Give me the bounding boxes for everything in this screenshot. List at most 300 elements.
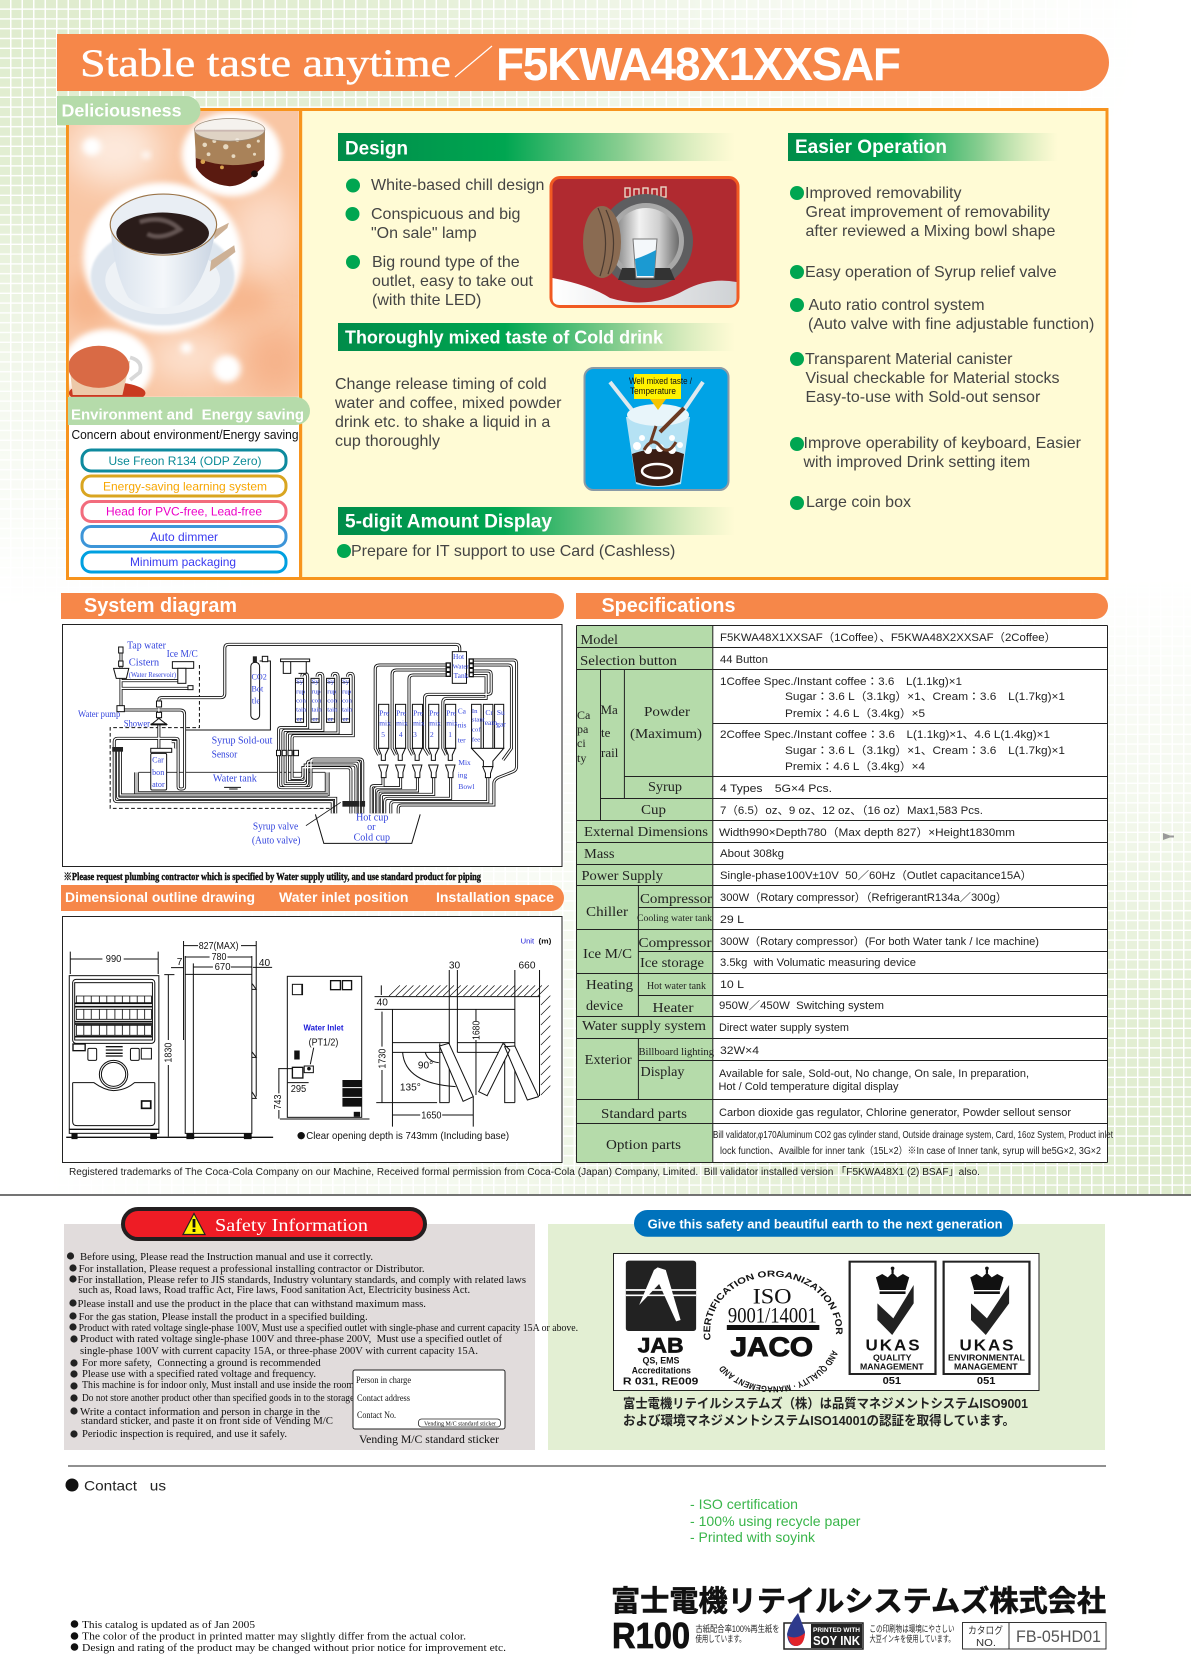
UKAS environmental mark (944, 1262, 1029, 1387)
safety text: For installation, Please request a professional installing contractor or Distributor. (79, 1263, 425, 1275)
section: Easier Operation: Easy-to-use with Sold-out sensor (806, 389, 1041, 406)
dimension labels: 660 (519, 961, 536, 972)
diagram labels: Bowl (458, 782, 474, 791)
table values: 1Coffee Spec./Instant coffee：3.6 L(1.1kg)×1 (720, 676, 962, 688)
diagram labels: tain (312, 707, 322, 714)
soy ink mark: 大豆インキを使用しています。 (870, 1633, 954, 1644)
safety text: Please use with a specified rated voltage and frequency. (82, 1368, 316, 1380)
section: 5-digit display: 5-digit Amount Display (345, 512, 552, 532)
dimension labels: 1650 (421, 1110, 442, 1121)
safety text: Please install and use the product in the place that can withstand maximum mass. (78, 1298, 426, 1310)
image: mixed cup: Well mixed taste / (629, 376, 692, 386)
diagram labels: Cold cup (354, 833, 390, 844)
diagram labels: con (342, 697, 352, 704)
table row labels: Ca (577, 708, 591, 722)
back view (278, 976, 369, 1119)
UKAS quality mark: UKAS (866, 1337, 920, 1354)
dimension labels: 990 (106, 954, 122, 965)
section: Easier Operation: Easier Operation (795, 137, 947, 158)
dimension labels: 780 (212, 952, 227, 963)
section: Design: outlet, easy to take out (372, 273, 534, 290)
diagram labels: Ice M/C (167, 649, 198, 660)
UKAS quality mark: QUALITY (873, 1353, 911, 1363)
JAB logo: QS, EMS (642, 1356, 680, 1366)
table row labels: device (586, 999, 623, 1014)
diagram labels: Tap water (127, 640, 167, 651)
heading: drawings: Installation space (436, 889, 554, 905)
table values: 7（6.5）oz、9 oz、12 oz、（16 oz）Max1,583 Pcs. (720, 804, 983, 817)
diagram labels: Sy (296, 678, 304, 685)
dimension labels: 1730 (377, 1048, 388, 1069)
UKAS quality mark: 051 (883, 1375, 901, 1387)
ISO JACO seal: CERTIFICATION ORGANIZATION FOR ENVIRONMENT (703, 1270, 843, 1340)
dimension labels: Unit (521, 937, 534, 946)
diagram labels: In (472, 708, 478, 715)
diagram labels: er (328, 716, 334, 723)
cistern and ice machine (114, 647, 194, 724)
section: 5-digit display: Prepare for IT support to use Card (Cashless) (351, 543, 675, 560)
table row labels: Mass (584, 847, 614, 862)
diagram labels: Water pump (78, 710, 121, 720)
dimension labels: (PT1/2) (309, 1037, 338, 1048)
heading: drawings: Dimensional outline drawing (65, 889, 255, 905)
mixing bowls (379, 748, 455, 778)
ISO JACO seal (703, 1270, 843, 1392)
diagram labels: ing (458, 771, 468, 780)
dimension labels: 295 (291, 1084, 307, 1095)
text: certification statement: 富士電機リテイルシステムズ（株）は品質マネジメントシステムISO9001 (623, 1396, 1028, 1411)
diagram labels: Sy (327, 678, 335, 685)
section: Easier Operation: (Auto valve with fine adjustable function) (808, 316, 1094, 333)
diagram labels: mix (379, 719, 391, 728)
heading: System diagram: System diagram (84, 595, 237, 617)
UKAS environmental mark: 051 (977, 1375, 996, 1387)
eco item 1 (82, 450, 286, 471)
UKAS environmental mark: MANAGEMENT (954, 1362, 1018, 1371)
table row labels: External Dimensions (584, 825, 708, 840)
table row labels: ci (577, 736, 586, 750)
saucer (90, 241, 235, 326)
section: Easier Operation: Visual checkable for Material stocks (806, 370, 1060, 387)
R100 mark: R100 (612, 1615, 690, 1656)
diagram labels: Syrup valve (253, 822, 299, 833)
diagram labels: Pre (446, 709, 457, 718)
dimension labels: 40 (377, 998, 388, 1009)
title banner (57, 34, 1109, 91)
side marker arrow (1163, 833, 1174, 840)
diagram labels: Water tank (213, 774, 258, 785)
diagram labels: or (367, 822, 376, 833)
heading: Specifications (576, 593, 1108, 619)
catalog number box (962, 1622, 1106, 1649)
safety text: Write a contact information and person in charge in the (80, 1406, 320, 1418)
table values: Hot / Cold temperature digital display (718, 1081, 899, 1093)
diagram labels: rup (327, 688, 337, 695)
text: catalog notes: Design and rating of the product may be changed without prior notice for improvement etc. (82, 1642, 506, 1654)
cup outline (315, 814, 420, 843)
table row labels: Exterior (585, 1053, 632, 1068)
section: Design: White-based chill design (371, 177, 544, 194)
table row labels: Cup (641, 803, 666, 818)
catalog number box: FB-05HD01 (1016, 1627, 1101, 1646)
cup body (110, 194, 235, 308)
diagram labels: Mix (458, 758, 471, 767)
diagram labels: nis (458, 721, 467, 730)
section: Easier Operation: with improved Drink setting item (802, 454, 1030, 471)
diagram labels: Hot (453, 652, 464, 661)
diagram labels: (Auto valve) (252, 836, 301, 847)
section: Design (338, 133, 735, 309)
diagram labels: Pre (413, 709, 424, 718)
panel: safety information (64, 1209, 578, 1450)
table: specifications (576, 626, 1113, 1162)
table values: Premix：4.6 L（3.4kg）×4 (785, 760, 925, 773)
soy ink mark (784, 1613, 954, 1649)
table values: Available for sale, Sold-out, No change, On sale, In preparation, (719, 1068, 1029, 1080)
company name: 富士電機リテイルシステムズ株式会社 (611, 1584, 1106, 1618)
eco item 2 (82, 476, 286, 496)
CO2 bottle (251, 656, 268, 719)
UKAS quality mark (850, 1262, 935, 1387)
diagram labels: ator (152, 780, 165, 789)
table row labels: Water supply system (582, 1019, 706, 1034)
section: Thoroughly mixed: Change release timing of cold (335, 376, 547, 393)
safety text: single-phase 100V with current capacity 15A, or three-phase 200V with current capacity 15A. (80, 1345, 478, 1357)
table values: 300W（Rotary compressor）(For both Water tank / Ice machine) (720, 935, 1039, 948)
table values: 10 L (720, 979, 744, 991)
standard sticker: Contact address (357, 1393, 410, 1403)
table values: F5KWA48X1XXSAF（1Coffee）、F5KWA48X2XXSAF（2Coffee） (720, 631, 1056, 644)
diagram labels: er (312, 716, 318, 723)
section: Easier Operation: Auto ratio control system (808, 297, 985, 314)
chart: system diagram (62, 624, 562, 866)
next generation pill: Give this safety and beautiful earth to the next generation (648, 1216, 1003, 1232)
standard sticker: Person in charge (356, 1375, 411, 1385)
label: Environment and Energy saving (68, 397, 310, 425)
installation space (375, 970, 550, 1127)
table row labels: Ice storage (640, 956, 704, 971)
ISO JACO seal: JACO (731, 1332, 813, 1362)
eco item 3: Head for PVC-free, Lead-free (106, 504, 262, 518)
text: eco claims: - 100% using recycle paper (690, 1513, 861, 1529)
table values: 32W×4 (720, 1045, 759, 1057)
section: Easier Operation: Improved removability (805, 185, 962, 202)
diagram labels: tle (252, 697, 260, 706)
ISO JACO seal: AND QUALITY · MANAGEMENT AND (720, 1350, 838, 1392)
heading: drawings: Water inlet position (279, 889, 408, 905)
eco item 4 (82, 526, 286, 546)
diagram labels: Sy (312, 678, 319, 685)
diagram labels: Tank (454, 671, 469, 680)
table values: 2Coffee Spec./Instant coffee：3.6 L(1.1kg)×1、4.6 L(1.4kg)×1 (720, 729, 1050, 741)
table values: 44 Button (720, 654, 768, 666)
soy ink mark: PRINTED WITH (813, 1627, 860, 1634)
table row labels: Ice M/C (583, 947, 632, 962)
diagram labels: Hot cup (356, 813, 388, 824)
safety text: Do not store another product other than specified goods in to the storage. (82, 1392, 357, 1404)
diagram labels: (Water Reservoir) (129, 670, 177, 679)
dimension labels: 1830 (164, 1042, 175, 1063)
R100 mark (612, 1615, 780, 1656)
section: Easier Operation: Great improvement of removability (806, 204, 1050, 221)
soy ink mark: SOY INK (813, 1633, 861, 1648)
JAB logo (623, 1261, 698, 1388)
water tank (135, 772, 329, 796)
diagram labels: rup (312, 688, 321, 695)
diagram labels: Cr (485, 708, 493, 717)
table row labels: Powder (644, 705, 690, 720)
section: Design: Big round type of the (372, 254, 520, 271)
safety text: Product with rated voltage single-phase 100V, Must use a specified outlet with single-phase and current capacity 15A or above. (79, 1322, 578, 1334)
diagram labels: Sensor (212, 749, 238, 760)
section: Thoroughly mixed: cup thoroughly (335, 433, 440, 450)
text: catalog notes (71, 1619, 506, 1654)
diagram labels: tain (296, 707, 307, 714)
diagram labels: mix (446, 719, 458, 728)
hot water tank (446, 652, 473, 683)
table values: 4 Types 5G×4 Pcs. (720, 783, 832, 795)
section: Thoroughly mixed: Thoroughly mixed taste of Cold drink (345, 328, 664, 348)
diagram labels: 5 (381, 730, 385, 739)
heading: Specifications: Specifications (602, 595, 736, 617)
table row labels: pa (577, 722, 589, 736)
dimension labels: 827(MAX) (199, 941, 239, 952)
table row labels: Display (640, 1065, 684, 1080)
eco item 5: Minimum packaging (130, 555, 236, 569)
text: certification statement (623, 1396, 1028, 1428)
label: Environment and Energy saving: Environment and Energy saving (71, 408, 304, 424)
ISO JACO seal: ISO (753, 1284, 792, 1309)
JAB logo: JAB (638, 1333, 684, 1357)
diagram labels: 2 (430, 730, 434, 739)
section: Design: Conspicuous and big (371, 206, 520, 223)
table row labels: (Maximum) (630, 727, 702, 742)
diagram labels: er (297, 716, 303, 723)
table values: Sugar：3.6 L（3.1kg）×1、Cream：3.6 L(1.7kg)×1 (785, 690, 1065, 703)
section: Easier Operation: Transparent Material canister (805, 351, 1013, 368)
front view (66, 976, 273, 1139)
R100 mark: 使用しています。 (696, 1633, 746, 1644)
safety heading pill (123, 1209, 425, 1239)
section: Thoroughly mixed (334, 323, 735, 450)
diagram labels: rup (342, 688, 352, 695)
section: Easier Operation: after reviewed a Mixing bowl shape (806, 223, 1056, 240)
image: dispenser outlet (551, 178, 738, 306)
diagram labels: Syrup Sold-out (212, 736, 273, 747)
table row labels: rail (601, 745, 619, 760)
table row labels: Compressor (640, 892, 712, 907)
table values: lock function、Availble for inner tank（15L×2）※In case of Inner tank, syrup will be5G×2, 3G×2 (720, 1145, 1101, 1157)
dimension labels: (m) (539, 937, 552, 946)
diagram labels: mix (396, 719, 408, 728)
safety text (78, 1251, 578, 1440)
diagram labels: er (343, 716, 349, 723)
table values: 300W（Rotary compressor）（RefrigerantR134a／300g） (720, 891, 1007, 904)
section: 5-digit display (337, 507, 735, 560)
diagram labels: CO2 (251, 673, 267, 682)
label: Deliciousness: Deliciousness (62, 100, 182, 120)
table row labels: Hot water tank (647, 981, 707, 992)
syrup containers (281, 659, 350, 722)
safety text: For installation, Please refer to JIS standards, Industry voluntary standards, and comply with related laws (78, 1274, 526, 1286)
diagram labels: ter (458, 735, 466, 744)
table values: Single-phase100V±10V 50／60Hz（Outlet capacitance15A） (720, 869, 1032, 882)
UKAS quality mark: MANAGEMENT (860, 1362, 924, 1371)
JAB logo: Accreditations (632, 1366, 691, 1377)
diagram labels: stant (472, 717, 485, 724)
catalog number box: NO. (976, 1637, 996, 1649)
text: catalog notes: The color of the product in printed matter may slightly differ from the actual color. (82, 1630, 466, 1642)
eco item 5 (82, 552, 286, 572)
syrup valves (277, 750, 365, 826)
diagram labels: gar (496, 719, 506, 728)
diagram labels: Water (453, 663, 469, 670)
eco item 2: Energy-saving learning system (103, 480, 267, 494)
dimension labels: 743 (273, 1094, 284, 1109)
diagram labels: tain (327, 707, 338, 714)
safety text: For more safety, Connecting a ground is recommended (82, 1357, 321, 1369)
diagram labels: Bot (251, 685, 264, 694)
dimension labels: 670 (215, 962, 231, 973)
text: concern: Concern about environment/Energy saving (72, 428, 299, 442)
next generation pill (634, 1210, 1013, 1237)
tea cup (68, 346, 146, 397)
dimension labels: 135° (400, 1083, 421, 1094)
heading: drawings (61, 885, 564, 911)
section: Easier Operation: Improve operability of keyboard, Easier (804, 435, 1082, 452)
diagram labels: Car (152, 756, 164, 765)
diagram labels: 3 (413, 730, 417, 739)
dimension labels: 1680 (471, 1020, 482, 1040)
image: mixed cup (584, 368, 728, 490)
text: certification statement: および環境マネジメントシステムISO14001の認証を取得しています。 (623, 1413, 1015, 1428)
table row labels: Chiller (586, 905, 628, 920)
safety heading pill: Safety Information (215, 1215, 368, 1235)
section: Design: "On sale" lamp (371, 225, 477, 242)
iced glass (194, 119, 265, 186)
title banner: F5KWA48X1XXSAF (496, 38, 901, 90)
text: contact us: Contact us (84, 1478, 166, 1494)
safety text: Periodic inspection is required, and use it safely. (82, 1428, 287, 1440)
text: catalog notes: This catalog is updated as of Jan 2005 (82, 1619, 256, 1631)
eco item 4: Auto dimmer (150, 530, 218, 544)
dimension labels: 7 (177, 957, 183, 968)
panel: features (57, 96, 1107, 578)
diagram labels: mix (413, 719, 425, 728)
section: Thoroughly mixed: drink etc. to shake a liquid in a (335, 414, 550, 431)
table row labels: Heater (652, 1001, 694, 1016)
table row labels: Heating (586, 978, 633, 993)
note: plumbing: ※Please request plumbing contractor which is specified by Water supply utility, and use standard product for piping (64, 872, 482, 883)
safety text: standard sticker, and paste it on front side of Vending M/C (81, 1415, 333, 1427)
diagram labels: Sy (342, 678, 350, 685)
table row labels: te (601, 725, 611, 740)
text: eco claims (690, 1496, 861, 1545)
text: eco claims: - ISO certification (690, 1496, 798, 1512)
safety text: For the gas station, Please install the product in a specified building. (79, 1311, 368, 1323)
diagram labels: rup (296, 688, 306, 695)
section: Design: (with thite LED) (372, 292, 481, 309)
diagram labels: Su (497, 708, 505, 717)
standard sticker (353, 1370, 505, 1446)
diagram labels: Ca (458, 707, 467, 716)
text: trademarks: Registered trademarks of The Coca-Cola Company on our Machine, Received formal permission from Coca-Cola (Japan) Company, Limited. Bill validator installed version 「F5KWA48X1 (2) BSAF」also. (69, 1166, 980, 1178)
safety text: This machine is for indoor only, Must install and use inside the room. (82, 1379, 357, 1391)
diagram labels: cof (472, 727, 481, 734)
table row labels: Option parts (606, 1138, 681, 1153)
table values: Carbon dioxide gas regulator, Chlorine generator, Powder sellout sensor (719, 1107, 1071, 1119)
label: Deliciousness (57, 96, 200, 125)
table row labels: Cooling water tank (637, 914, 712, 924)
soy ink mark: この印刷物は環境にやさしい (870, 1623, 954, 1634)
table row labels: Power Supply (582, 869, 663, 884)
panel: certifications (548, 1210, 1105, 1450)
dimension labels (106, 937, 552, 1142)
dimension labels: Water Inlet (304, 1024, 344, 1033)
table values: Sugar：3.6 L（3.1kg）×1、Cream：3.6 L(1.7kg)×1 (785, 744, 1065, 757)
R100 mark: 古紙配合率100%再生紙を (696, 1623, 780, 1634)
UKAS environmental mark: ENVIRONMENTAL (948, 1353, 1025, 1363)
catalog number box: カタログ (968, 1624, 1003, 1637)
dimension labels: Clear opening depth is 743mm (Including base) (306, 1131, 509, 1142)
dimension labels: 40 (259, 958, 271, 969)
chart: dimensional drawings (62, 916, 562, 1162)
table values: 950W／450W Switching system (719, 999, 884, 1012)
diagram labels: Pre (379, 709, 390, 718)
table values: 3.5kg with Volumatic measuring device (720, 957, 916, 969)
section: Easier Operation: Large coin box (806, 494, 911, 511)
standard sticker: Contact No. (357, 1410, 396, 1420)
diagram labels: 4 (399, 730, 403, 739)
photo: coffee cups (62, 111, 306, 404)
table row labels: Ma (600, 702, 618, 717)
diagram labels: Cistern (129, 658, 159, 669)
diagram labels (78, 640, 506, 847)
table row labels: Selection button (580, 654, 677, 669)
table values: Direct water supply system (719, 1022, 849, 1034)
diagram labels: 1 (448, 730, 452, 739)
eco item 1: Use Freon R134 (ODP Zero) (108, 454, 262, 468)
table row labels: Model (580, 633, 618, 648)
table row labels: Syrup (648, 780, 682, 795)
section: Easier Operation: Easy operation of Syrup relief valve (805, 264, 1057, 281)
table values: Premix：4.6 L（3.4kg）×5 (785, 707, 925, 720)
title banner: Stable taste anytime (80, 42, 451, 85)
ISO JACO seal: 9001/14001 (728, 1304, 817, 1328)
table row labels: Standard parts (601, 1107, 687, 1122)
eco item 3 (82, 502, 286, 522)
premix canisters (379, 704, 504, 778)
diagram labels: eam (485, 718, 497, 727)
diagram labels: con (296, 697, 307, 704)
safety text: Product with rated voltage single-phase 100V and three-phase 200V, Must use a specified outlet of (80, 1333, 502, 1345)
diagram labels: Pre (429, 709, 440, 718)
dimension labels: 30 (449, 961, 461, 972)
JAB logo: R 031, RE009 (623, 1376, 698, 1388)
image: mixed cup: Temperature (630, 386, 676, 396)
safety bullets (67, 1252, 78, 1438)
heading: System diagram (61, 593, 564, 619)
table row labels (577, 633, 715, 1153)
UKAS environmental mark: UKAS (960, 1337, 1014, 1354)
section: Thoroughly mixed: water and coffee, mixed powder (334, 395, 562, 412)
dimension labels: 90° (418, 1061, 433, 1072)
section: Design: Design (345, 138, 408, 160)
table row labels: Billboard lighting (638, 1047, 715, 1058)
diagram labels: mix (429, 719, 441, 728)
safety text: such as, Road laws, Road traffic Act, Fire laws, Food sanitation Act, Electricity business Act. (79, 1284, 470, 1296)
table values: Width990×Depth780（Max depth 827）×Height1830mm (719, 826, 1015, 839)
